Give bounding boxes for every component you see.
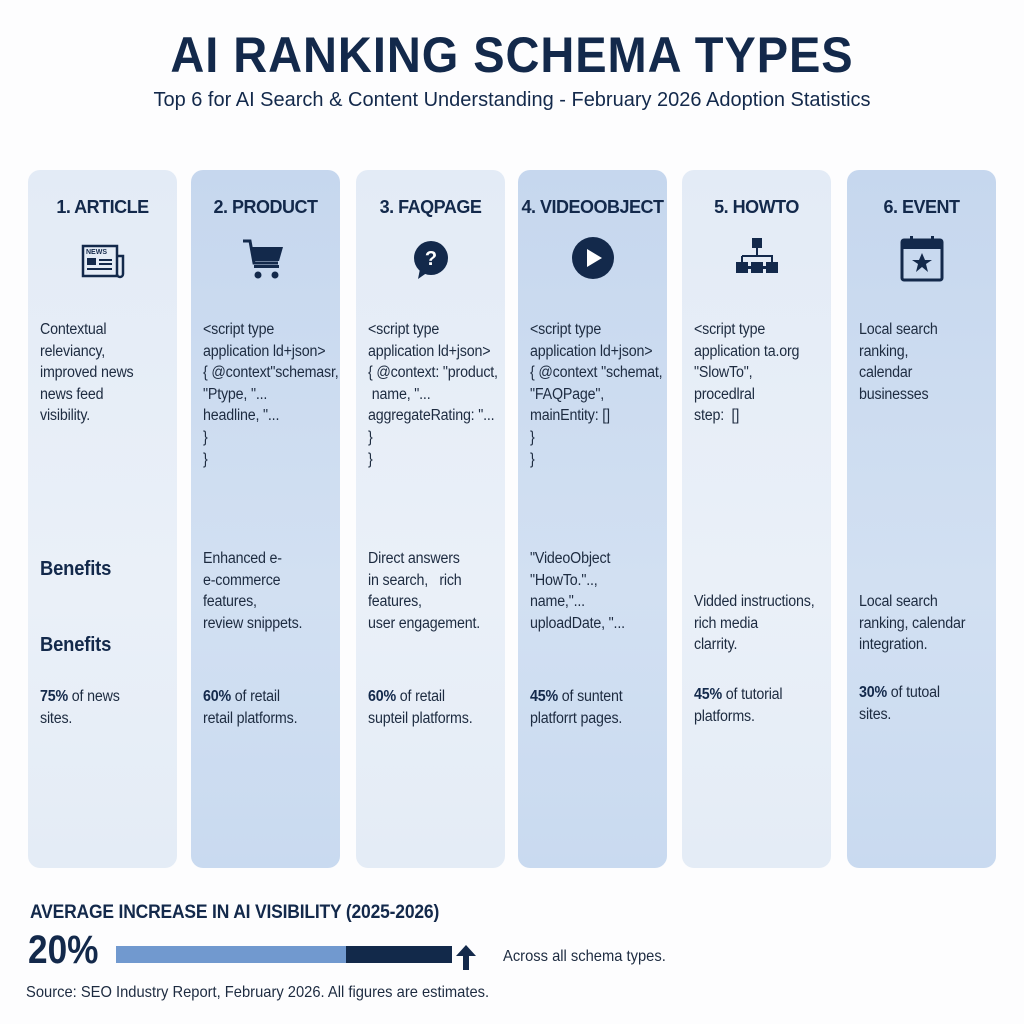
- source: Source: SEO Industry Report, February 2026. All figures are estimates.: [26, 984, 489, 1001]
- heading: event: 6. EVENT: [883, 197, 960, 217]
- stat: 20%: 20%: [28, 928, 98, 972]
- text: benefits: Benefits: [40, 558, 111, 580]
- text: code: name, "...: [372, 386, 430, 403]
- text: benefits: ranking, calendar: [859, 615, 965, 632]
- panel: product: [191, 170, 340, 868]
- text: across all: Across all schema types.: [503, 948, 666, 965]
- text: code: step: []: [694, 407, 739, 424]
- stat: [694, 686, 782, 725]
- text: code: { @context "schemat,: [530, 364, 662, 381]
- icon: cart: [243, 240, 283, 278]
- text: benefits: [203, 550, 302, 632]
- text: benefits: integration.: [859, 636, 927, 653]
- text: code: "SlowTo",: [694, 364, 752, 381]
- stat: platforrt pages.: [530, 710, 622, 727]
- panel: event: [847, 170, 996, 868]
- text: code: }: [530, 451, 535, 468]
- heading: product: 2. PRODUCT: [213, 197, 318, 217]
- text: description: releviancy,: [40, 343, 105, 360]
- panel: article: [28, 170, 177, 868]
- stat: [40, 688, 120, 727]
- heading: videoobject: 4. VIDEOOBJECT: [521, 197, 664, 217]
- text: benefits: features,: [368, 593, 422, 610]
- text: code: aggregateRating: "...: [368, 407, 494, 424]
- stat: 45% of tutorial: [694, 686, 782, 703]
- text: description: ranking,: [859, 343, 908, 360]
- text: benefits: Enhanced e-: [203, 550, 282, 567]
- text: description: calendar: [859, 364, 912, 381]
- text: benefits: "VideoObject: [530, 550, 610, 567]
- heading: article: 1. ARTICLE: [56, 197, 149, 217]
- text: description: visibility.: [40, 407, 90, 424]
- stat: platforms.: [694, 708, 755, 725]
- text: code: application ld+json>: [530, 343, 652, 360]
- text: code: { @context"schemasr,: [203, 364, 339, 381]
- text: description: [40, 321, 134, 424]
- text: code: <script type: [203, 321, 274, 338]
- text: description: businesses: [859, 386, 929, 403]
- icon: newspaper: NEWS: [86, 249, 107, 256]
- text: benefits: Direct answers: [368, 550, 460, 567]
- text: code: [694, 321, 799, 424]
- heading: faqpage: 3. FAQPAGE: [380, 197, 481, 217]
- panel: videoobject: [518, 170, 667, 868]
- text: code: [368, 321, 498, 468]
- bar chart: increase: [116, 946, 452, 963]
- icon: question bubble: [414, 241, 448, 279]
- panel: faqpage: [356, 170, 505, 868]
- text: code: }: [203, 451, 208, 468]
- text: benefits: features,: [203, 593, 257, 610]
- icon: hierarchy: [736, 238, 778, 273]
- text: benefits: rich media: [694, 615, 758, 632]
- icon: newspaper: [82, 244, 124, 278]
- text: description: Contextual: [40, 321, 106, 338]
- heading: howto: 5. HOWTO: [714, 197, 799, 217]
- stat: 60% of retail: [368, 688, 445, 705]
- icon: question bubble: ?: [424, 248, 437, 270]
- text: benefits: [530, 550, 625, 632]
- stat: retail platforms.: [203, 710, 297, 727]
- text: benefits: clarrity.: [694, 636, 737, 653]
- text: code: application ld+json>: [203, 343, 325, 360]
- text: code: procedlral: [694, 386, 755, 403]
- text: benefits: [368, 550, 480, 632]
- arrow: up: [456, 945, 476, 970]
- text: code: <script type: [694, 321, 765, 338]
- text: code: }: [203, 429, 208, 446]
- text: code: }: [530, 429, 535, 446]
- stat: sites.: [859, 706, 891, 723]
- stat: 75% of news: [40, 688, 120, 705]
- text: code: mainEntity: []: [530, 407, 610, 424]
- text: benefits: Vidded instructions,: [694, 593, 815, 610]
- text: description: improved news: [40, 364, 134, 381]
- text: code: }: [368, 429, 373, 446]
- text: benefits: e-commerce: [203, 572, 280, 589]
- stat: 30% of tutoal: [859, 684, 940, 701]
- stat: supteil platforms.: [368, 710, 472, 727]
- stat: [368, 688, 472, 727]
- text: code: "Ptype, "...: [203, 386, 267, 403]
- text: code: "FAQPage",: [530, 386, 604, 403]
- text: benefits 2: Benefits: [40, 634, 111, 656]
- text: code: { @context: "product,: [368, 364, 498, 381]
- stat: 45% of suntent: [530, 688, 623, 705]
- text: code: application ta.org: [694, 343, 799, 360]
- text: code: headline, "...: [203, 407, 279, 424]
- icon: play: [572, 237, 614, 279]
- title: AI RANKING SCHEMA TYPES: [170, 27, 854, 83]
- text: benefits: review snippets.: [203, 615, 302, 632]
- text: benefits: uploadDate, "...: [530, 615, 625, 632]
- text: description: Local search: [859, 321, 938, 338]
- text: code: }: [368, 451, 373, 468]
- text: benefits: Local search: [859, 593, 938, 610]
- text: benefits: "HowTo."..,: [530, 572, 598, 589]
- text: benefits: [859, 593, 966, 653]
- stat: [203, 688, 297, 727]
- text: description: [859, 321, 938, 403]
- text: description: news feed: [40, 386, 103, 403]
- text: code: [203, 321, 339, 468]
- stat: sites.: [40, 710, 72, 727]
- stat: [859, 684, 940, 723]
- stat: 60% of retail: [203, 688, 280, 705]
- text: code: [530, 321, 662, 468]
- text: benefits: user engagement.: [368, 615, 480, 632]
- text: code: application ld+json>: [368, 343, 490, 360]
- panel: howto: [682, 170, 831, 868]
- text: benefits: [694, 593, 815, 653]
- text: code: <script type: [368, 321, 439, 338]
- heading: average increase: AVERAGE INCREASE IN AI VISIBILITY (2025-2026): [30, 902, 439, 923]
- stat: [530, 688, 623, 727]
- icon: calendar star: [900, 236, 944, 282]
- text: benefits: name,"...: [530, 593, 585, 610]
- text: benefits: in search, rich: [368, 572, 462, 589]
- subtitle: Top 6 for AI Search & Content Understanding - February 2026 Adoption Statistics: [153, 89, 871, 111]
- text: code: <script type: [530, 321, 601, 338]
